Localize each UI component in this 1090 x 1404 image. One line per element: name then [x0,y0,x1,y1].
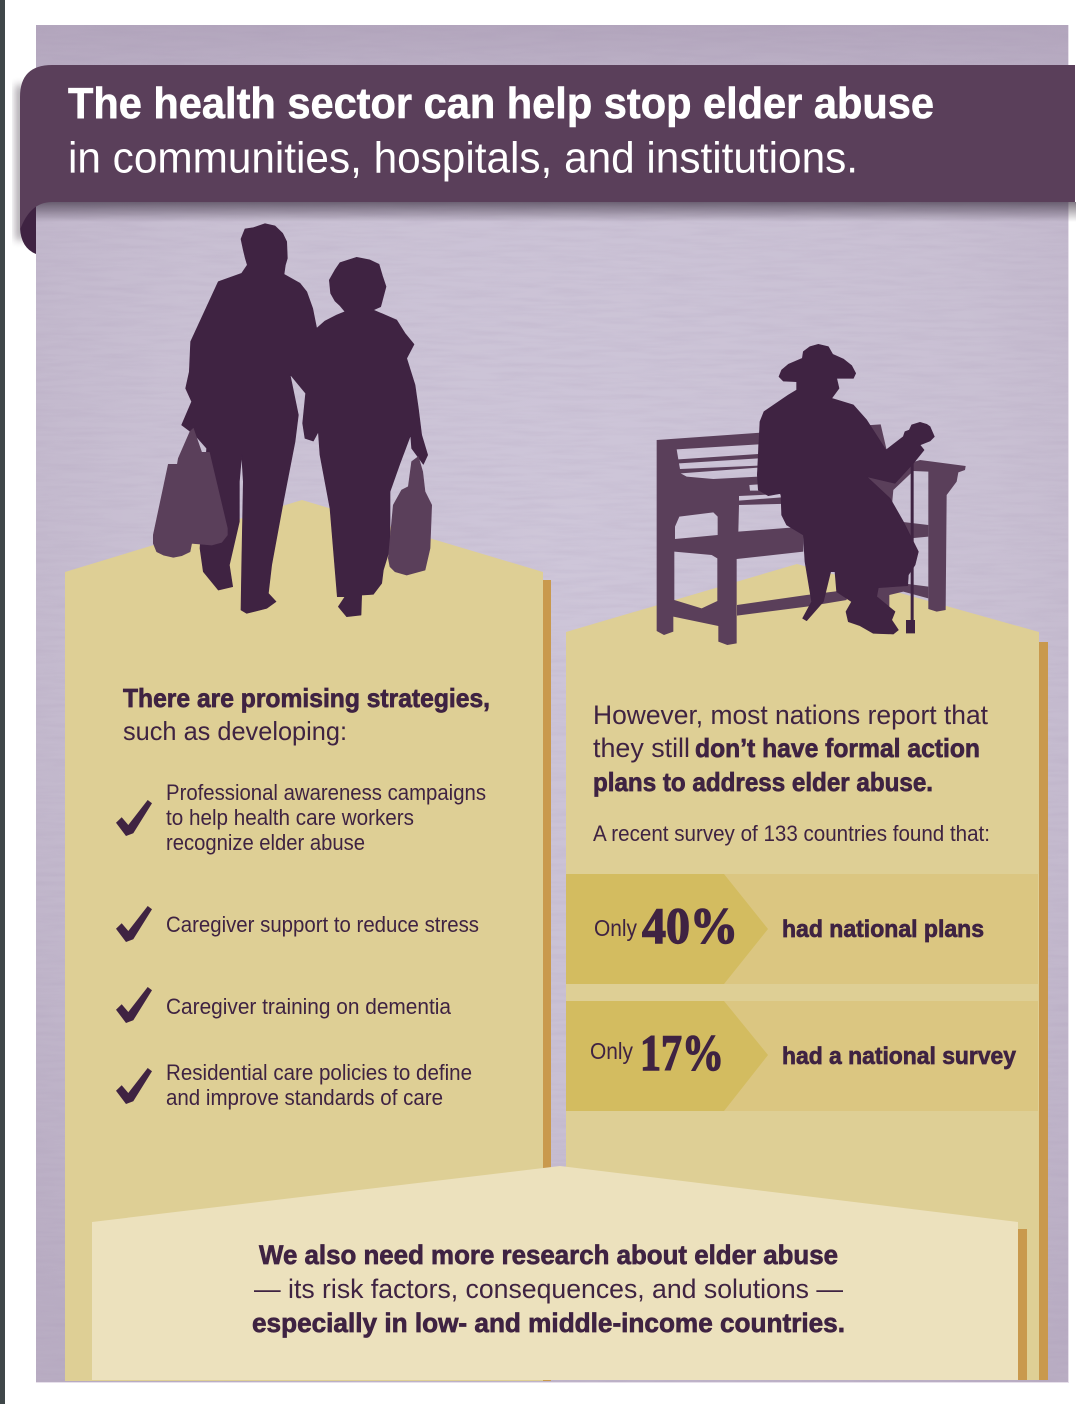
text block: no formal action plans [593,700,988,797]
icon: couple silhouette [182,224,428,617]
text block: no formal action plans: plans to address elder abuse. [593,767,933,797]
icon: check mark [116,906,152,942]
stat row: 17% national survey [566,1001,1038,1111]
stat row: 17% national survey: 17% [640,1026,724,1082]
heading: promising strategies [123,683,490,746]
list item: residential care policies [116,1060,472,1110]
icon: right shopping bag [388,457,432,575]
callout text: — its risk factors, consequences, and solutions — [254,1274,843,1304]
icon: cane [906,463,915,633]
list item: caregiver support [116,906,479,942]
panel: action plans (right) [566,564,1048,1380]
stat row: 17% national survey: Only [590,1038,633,1064]
stat row: 40% national plans: Only [594,915,637,941]
title: in communities, hospitals, and institutions. [68,134,858,182]
left page edge bar [0,0,5,1404]
ribbon fold [20,204,36,254]
callout text: We also need more research about elder abuse [259,1240,838,1270]
banner title ribbon [16,65,1076,254]
heading: promising strategies: such as developing: [123,716,347,746]
list item: awareness campaigns: Professional awareness campaigns [166,780,486,805]
heading: promising strategies: There are promising strategies, [123,683,490,713]
list item: residential care policies: Residential care policies to define [166,1060,472,1085]
list item: awareness campaigns: recognize elder abuse [166,830,365,855]
icon: seated person [757,344,934,634]
icon: check mark [116,800,152,836]
panel: strategies (left) [65,500,551,1381]
list item: caregiver training [116,987,452,1023]
icon: bench [657,424,966,645]
text: survey intro: A recent survey of 133 countries found that: [593,821,990,846]
icon: left shopping bags [153,428,227,557]
callout text [252,1240,845,1338]
title: The health sector can help stop elder abuse [68,79,934,128]
stat row: 40% national plans [566,874,1038,984]
text block: no formal action plans: don’t have formal action [695,733,980,763]
text block: no formal action plans: they still [593,733,690,763]
callout text: especially in low- and middle-income countries. [252,1308,845,1338]
ribbon band [20,65,1075,230]
stat row: 40% national plans: had national plans [782,916,984,943]
list item: residential care policies: and improve standards of care [166,1085,443,1110]
icon: check mark [116,987,152,1023]
list item: caregiver support: Caregiver support to reduce stress [166,912,479,937]
list item: awareness campaigns [116,780,486,855]
panel: research callout [92,1166,1027,1380]
stat row: 17% national survey: had a national survey [782,1043,1017,1070]
illustration: elder seated on bench with cane [657,344,966,645]
list item: caregiver training: Caregiver training on dementia [166,994,452,1019]
icon: check mark [116,1068,152,1104]
stat row: 40% national plans: 40% [642,899,738,955]
title [68,79,934,182]
illustration: couple walking with shopping bags [153,224,432,617]
text block: no formal action plans: However, most nations report that [593,700,988,730]
list item: awareness campaigns: to help health care workers [166,805,414,830]
